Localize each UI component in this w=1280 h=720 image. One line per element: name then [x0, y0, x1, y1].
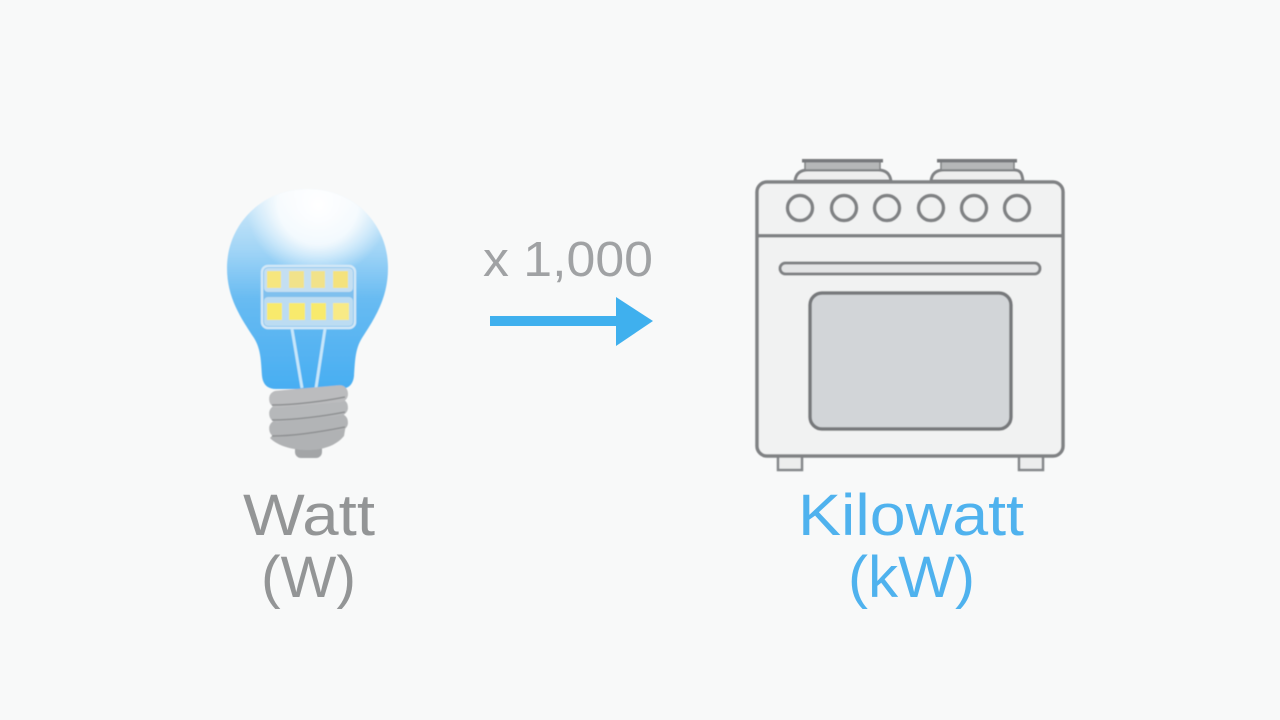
infographic: watt to kilowatt conversion [226, 158, 1066, 609]
burner left [795, 159, 891, 181]
filament wires [292, 329, 325, 388]
control knobs [788, 196, 1030, 220]
screw base [268, 385, 349, 458]
label: Kilowatt: Kilowatt [798, 483, 1024, 548]
stove body [757, 182, 1063, 456]
bulb highlight [252, 188, 380, 265]
LED panel [262, 266, 355, 328]
arrow [490, 297, 653, 346]
label: (W): (W) [261, 545, 356, 610]
multiplier label: x 1,000 [483, 233, 653, 287]
control panel divider [757, 234, 1063, 238]
icon: light bulb [227, 185, 389, 458]
bulb glass [227, 189, 388, 389]
label: Watt: Watt [243, 483, 375, 548]
burner right [931, 159, 1023, 181]
label: (kW): (kW) [848, 545, 975, 610]
oven window [810, 293, 1011, 429]
icon: stove [757, 159, 1063, 470]
feet [778, 456, 802, 470]
oven handle [780, 263, 1040, 274]
